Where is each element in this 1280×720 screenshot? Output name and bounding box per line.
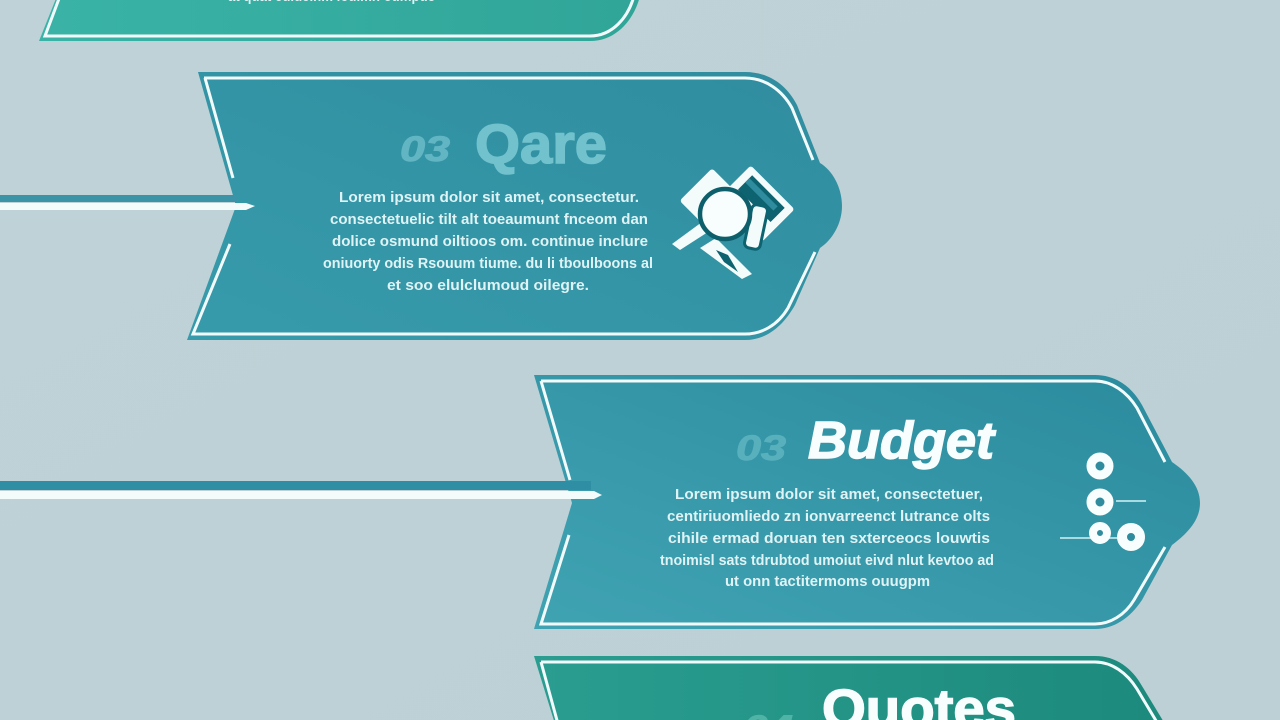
panel: top step (cropped) bbox=[39, 0, 640, 41]
body text: Qare bbox=[323, 189, 653, 294]
heading: Qare: Qare bbox=[475, 112, 607, 175]
body text: Qare: Lorem ipsum dolor sit amet, consectetur. bbox=[339, 189, 639, 206]
body text: Qare: consectetuelic tilt alt toeaumunt fnceom dan bbox=[330, 211, 648, 228]
body text: Budget: Lorem ipsum dolor sit amet, consectetuer, bbox=[675, 486, 983, 503]
panel: Quotes step (cropped) bbox=[534, 656, 1165, 720]
arrow: connector to Qare panel bbox=[0, 195, 255, 210]
body text: Qare: dolice osmund oiltioos om. continue inclure bbox=[332, 233, 648, 250]
body text: Qare: et soo elulclumoud oilegre. bbox=[387, 277, 589, 294]
body text: Budget: tnoimisl sats tdrubtod umoiut eivd nlut kevtoo ad bbox=[660, 552, 994, 569]
body text: Budget bbox=[660, 486, 994, 590]
arrow: connector to Budget panel bbox=[0, 481, 602, 499]
icon: connected rings bbox=[1060, 457, 1146, 546]
icon: magnifier over documents bbox=[672, 165, 795, 279]
number 03: 03 bbox=[736, 429, 787, 468]
panel: Qare step bbox=[187, 72, 842, 340]
body text: Budget: centiriuomliedo zn ionvarreenct lutrance olts bbox=[667, 508, 990, 525]
body text: Budget: cihile ermad doruan ten sxterceocs louwtis bbox=[668, 530, 990, 547]
body text: Budget: ut onn tactitermoms ouugpm bbox=[725, 573, 930, 590]
number 03: 03 bbox=[400, 130, 451, 169]
body text: Qare: oniuorty odis Rsouum tiume. du li tboulboons al bbox=[323, 255, 653, 272]
panel: Budget step bbox=[534, 375, 1200, 629]
heading: Budget: Budget bbox=[808, 412, 997, 470]
